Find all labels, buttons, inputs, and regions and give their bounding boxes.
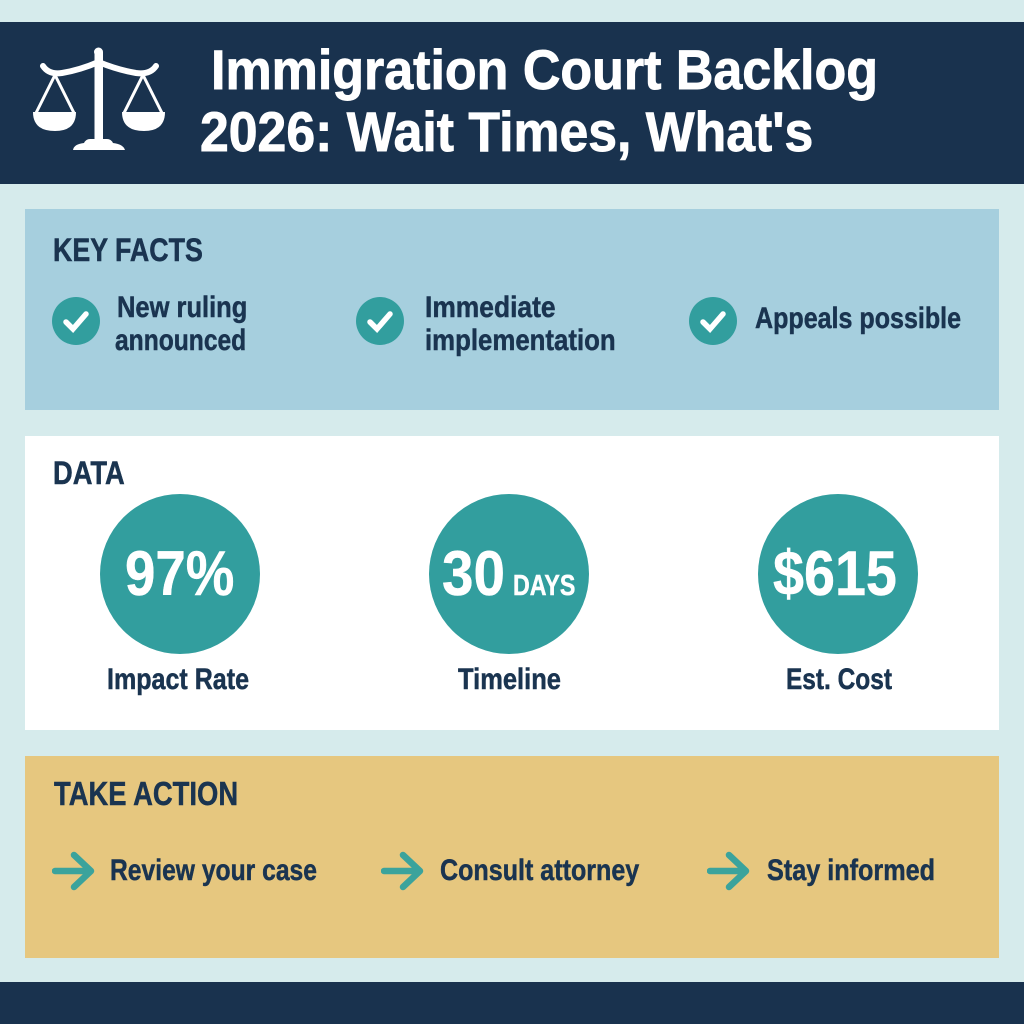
stat: estimated cost [758,494,918,696]
title [200,38,878,163]
stat: impact rate: Impact Rate [107,663,249,696]
fact: immediate implementation: implementation [425,324,616,357]
icon: check [356,297,404,345]
fact: appeals possible: Appeals possible [755,302,961,335]
icon: arrow [52,852,94,890]
action: review your case: Review your case [110,854,317,887]
heading: key facts: KEY FACTS [53,232,203,268]
panel: data [25,436,999,730]
icon: check [689,297,737,345]
stat: estimated cost: Est. Cost [786,663,892,696]
fact: appeals possible [689,297,961,345]
stat: timeline: DAYS [513,570,575,602]
icon: check [52,297,100,345]
heading: take action: TAKE ACTION [54,775,238,812]
panel: key facts [25,209,999,410]
fact: immediate implementation [356,291,616,357]
icon: arrow [381,852,424,890]
fact: new ruling announced: announced [115,324,246,357]
icon: arrow [707,852,750,890]
stat: impact rate: 97% [125,539,234,609]
action: stay informed [707,852,935,890]
icon: scales of justice [33,48,165,150]
title: 2026: Wait Times, What's [200,100,813,163]
action: consult attorney [381,852,640,890]
stat: timeline [429,494,589,696]
fact: new ruling announced [52,291,247,357]
stat: estimated cost: $615 [773,539,897,609]
heading: data: DATA [53,455,125,491]
stat: timeline: 30 [442,539,505,609]
stat: timeline: Timeline [458,663,561,696]
footer band [0,982,1024,1024]
fact: new ruling announced: New ruling [117,291,247,324]
action: review your case [52,852,317,890]
action: stay informed: Stay informed [767,854,935,887]
panel: take action [25,756,999,958]
stat: impact rate [100,494,260,696]
action: consult attorney: Consult attorney [440,854,639,887]
title: Immigration Court Backlog [211,38,878,101]
fact: immediate implementation: Immediate [425,291,556,324]
header band [0,22,1024,184]
